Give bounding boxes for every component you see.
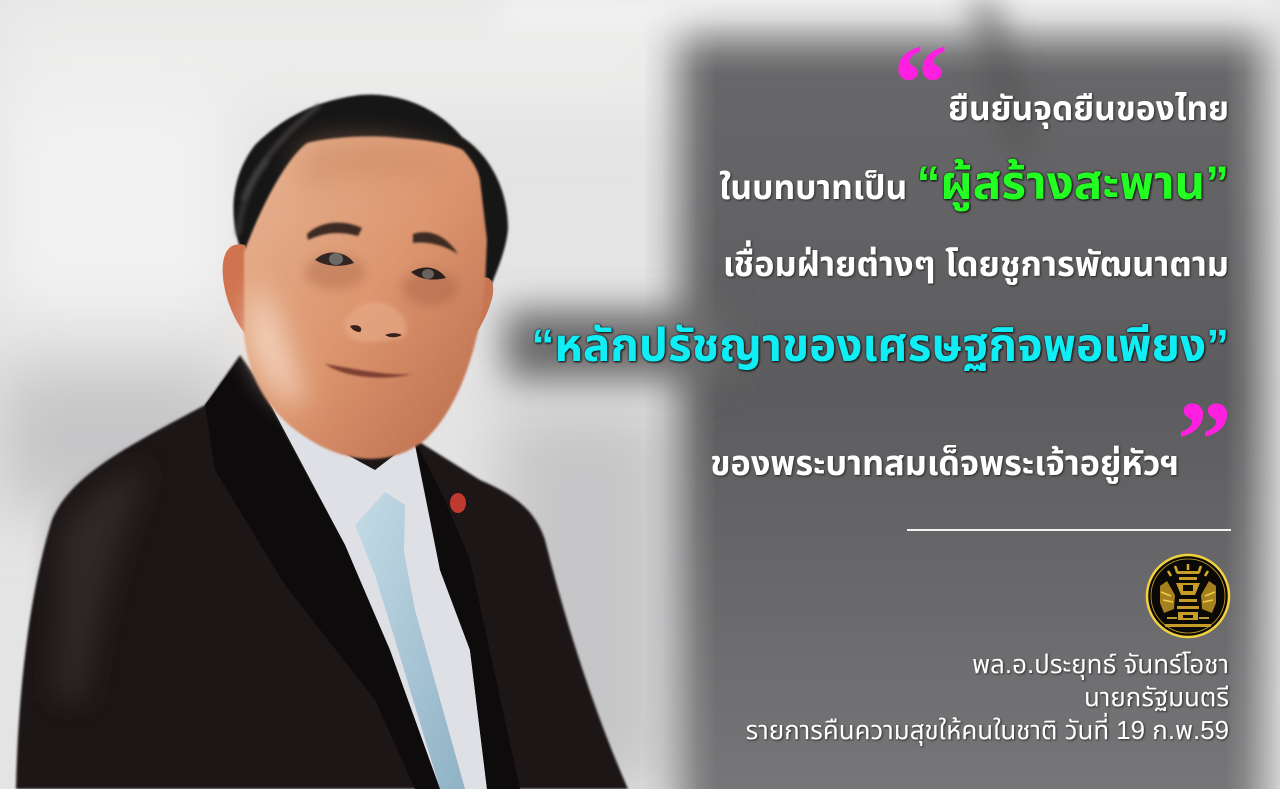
quote line 5: ของพระบาทสมเด็จพระเจ้าอยู่หัวฯ xyxy=(710,445,1179,483)
attribution: title: นายกรัฐมนตรี xyxy=(1084,684,1229,712)
quote line 3: เชื่อมฝ่ายต่างๆ โดยชูการพัฒนาตาม xyxy=(723,246,1229,284)
lapel pin xyxy=(450,493,466,513)
dark panel xyxy=(640,0,1280,789)
right lapel xyxy=(415,440,520,789)
quote line 4 cyan highlight: “หลักปรัชญาของเศรษฐกิจพอเพียง” xyxy=(532,320,1229,371)
hair xyxy=(233,95,508,305)
attribution: name: พล.อ.ประยุทธ์ จันทร์โอชา xyxy=(972,651,1229,679)
ear xyxy=(223,244,258,335)
necktie xyxy=(355,492,465,789)
face xyxy=(244,136,487,459)
opening quote mark: “ xyxy=(893,22,948,144)
eyes xyxy=(315,252,354,266)
closing quote mark: ” xyxy=(1177,379,1232,501)
eyebrows xyxy=(307,223,362,240)
shirt xyxy=(268,400,487,789)
divider rule xyxy=(907,529,1231,531)
suit jacket xyxy=(16,355,628,789)
quote line 2 with green highlight: ในบทบาทเป็น “ผู้สร้างสะพาน” xyxy=(719,157,1229,210)
quote line 1: ยืนยันจุดยืนของไทย xyxy=(948,91,1229,128)
eye shadows xyxy=(305,254,365,290)
nose xyxy=(343,302,407,342)
icon: government seal xyxy=(1146,554,1230,638)
attribution: programme and date: รายการคืนความสุขให้คนในชาติ วันที่ 19 ก.พ.59 xyxy=(746,717,1229,745)
mouth xyxy=(325,364,412,378)
left lapel xyxy=(205,358,440,789)
